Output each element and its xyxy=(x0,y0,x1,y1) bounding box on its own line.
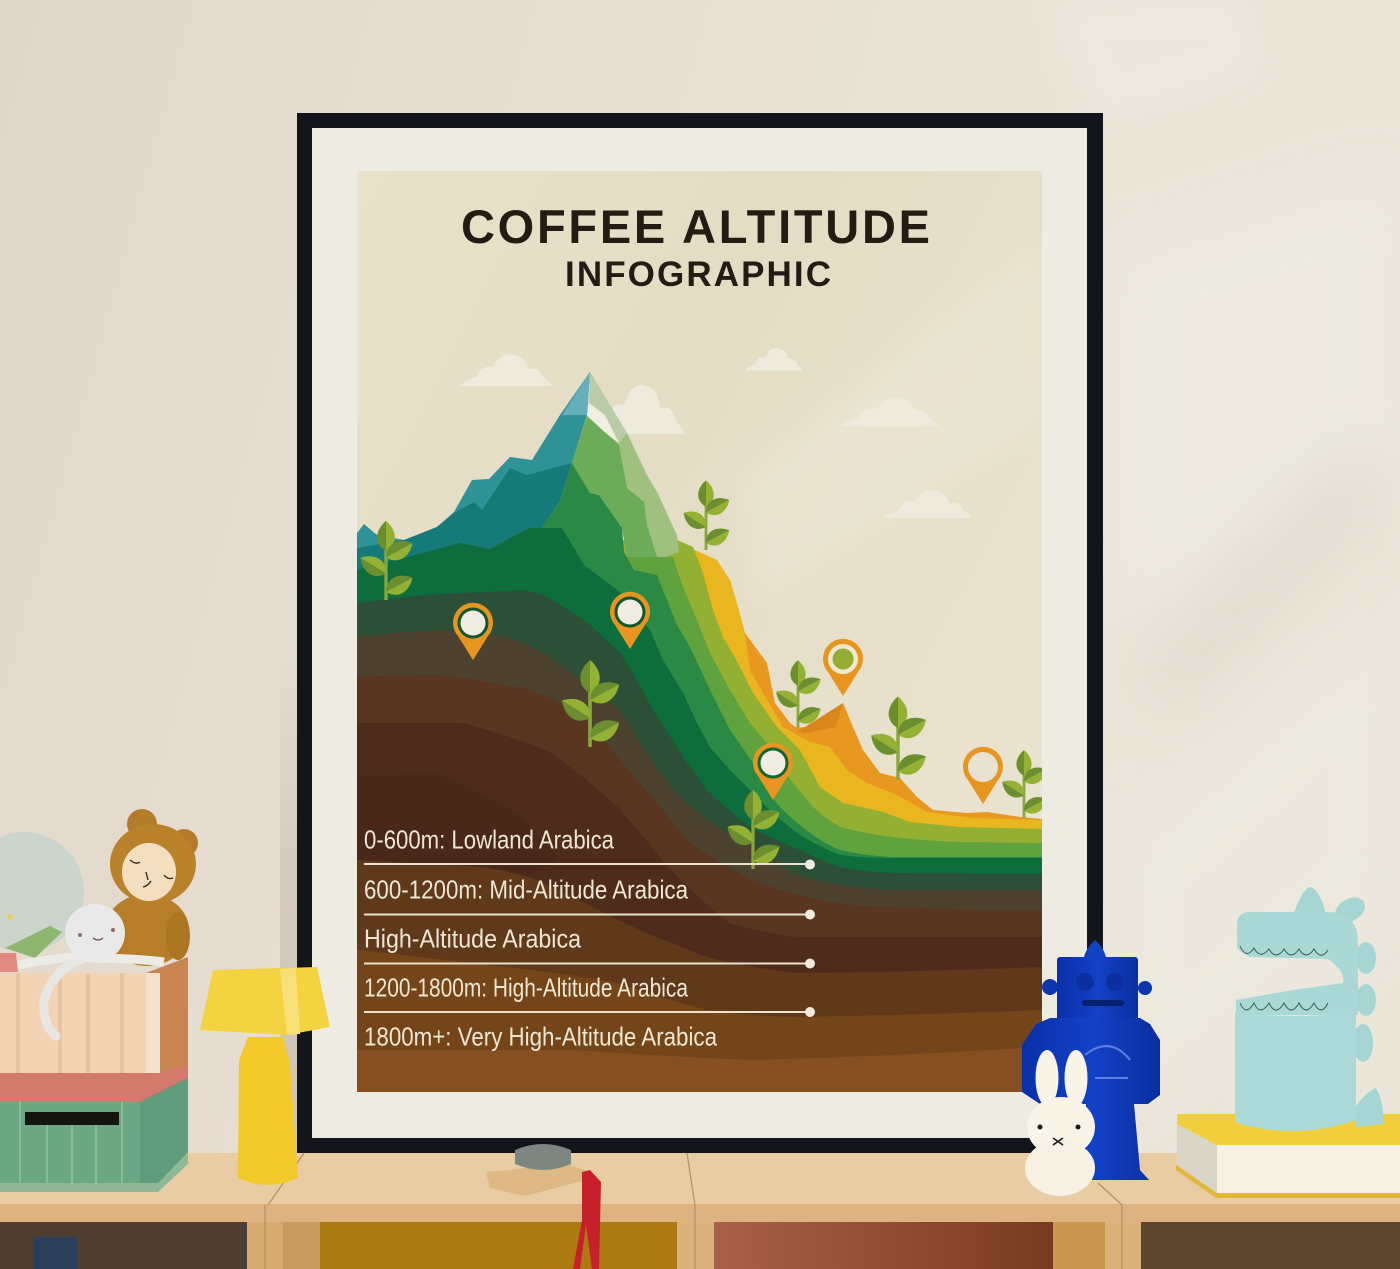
knitted octopus toy xyxy=(18,904,164,1036)
toy globe xyxy=(0,832,84,972)
dark green band xyxy=(357,528,1042,874)
orange slope xyxy=(745,633,1042,820)
legend label 5: 1800m+: Very High-Altitude Arabica xyxy=(364,1022,717,1052)
location pin 1 xyxy=(453,603,493,660)
location pin 5 xyxy=(963,747,1003,804)
deep forest band xyxy=(357,590,1042,890)
legend label 3: High-Altitude Arabica xyxy=(364,924,581,954)
legend rule 1 xyxy=(364,860,815,870)
mid green band xyxy=(626,557,1042,857)
brown band xyxy=(357,675,1042,937)
soil band xyxy=(357,860,1042,1017)
storage crates xyxy=(0,957,188,1192)
white rabbit lamp xyxy=(1025,1050,1095,1196)
legend rule 4 xyxy=(364,1007,815,1017)
lower soil band xyxy=(357,950,1042,1060)
medium green band xyxy=(542,463,1042,858)
light green facet xyxy=(572,416,657,557)
bottom soil band xyxy=(357,1047,1042,1092)
subtitle: INFOGRAPHIC xyxy=(565,255,831,294)
location pin 2 xyxy=(610,592,650,649)
location pin 3 xyxy=(823,639,863,696)
title: COFFEE ALTITUDE xyxy=(461,200,930,253)
dark soil band xyxy=(357,723,1042,973)
summit highlights xyxy=(589,372,627,443)
red ribbon xyxy=(573,1170,601,1269)
coffee plants xyxy=(356,480,1050,869)
legend rule 3 xyxy=(364,958,815,968)
teal ridge xyxy=(357,372,590,548)
yellow band xyxy=(694,550,1042,829)
dinosaur bank xyxy=(1235,887,1384,1131)
teddy bear xyxy=(105,809,198,966)
pale green summit ridge xyxy=(590,372,679,558)
yellow table lamp xyxy=(200,967,330,1185)
legend rule 2 xyxy=(364,910,815,920)
legend label 1: 0-600m: Lowland Arabica xyxy=(364,824,614,854)
wooden shelf xyxy=(0,1153,1400,1269)
framed poster xyxy=(297,113,1103,1153)
black frame xyxy=(297,113,1103,1153)
olive band xyxy=(623,540,1042,843)
poster artwork xyxy=(356,171,1050,1092)
white mat xyxy=(312,128,1087,1138)
clouds xyxy=(460,348,972,518)
location pin 4 xyxy=(753,743,793,800)
legend label 2: 600-1200m: Mid-Altitude Arabica xyxy=(364,874,688,904)
olive brown band xyxy=(357,630,1042,910)
legend label 4: 1200-1800m: High-Altitude Arabica xyxy=(364,972,688,1002)
wooden toy camera xyxy=(486,1144,586,1196)
mountain layers xyxy=(357,372,1042,1092)
blue robot bank xyxy=(1022,940,1160,1180)
book xyxy=(1176,1114,1400,1198)
altitude legend xyxy=(364,824,815,1052)
